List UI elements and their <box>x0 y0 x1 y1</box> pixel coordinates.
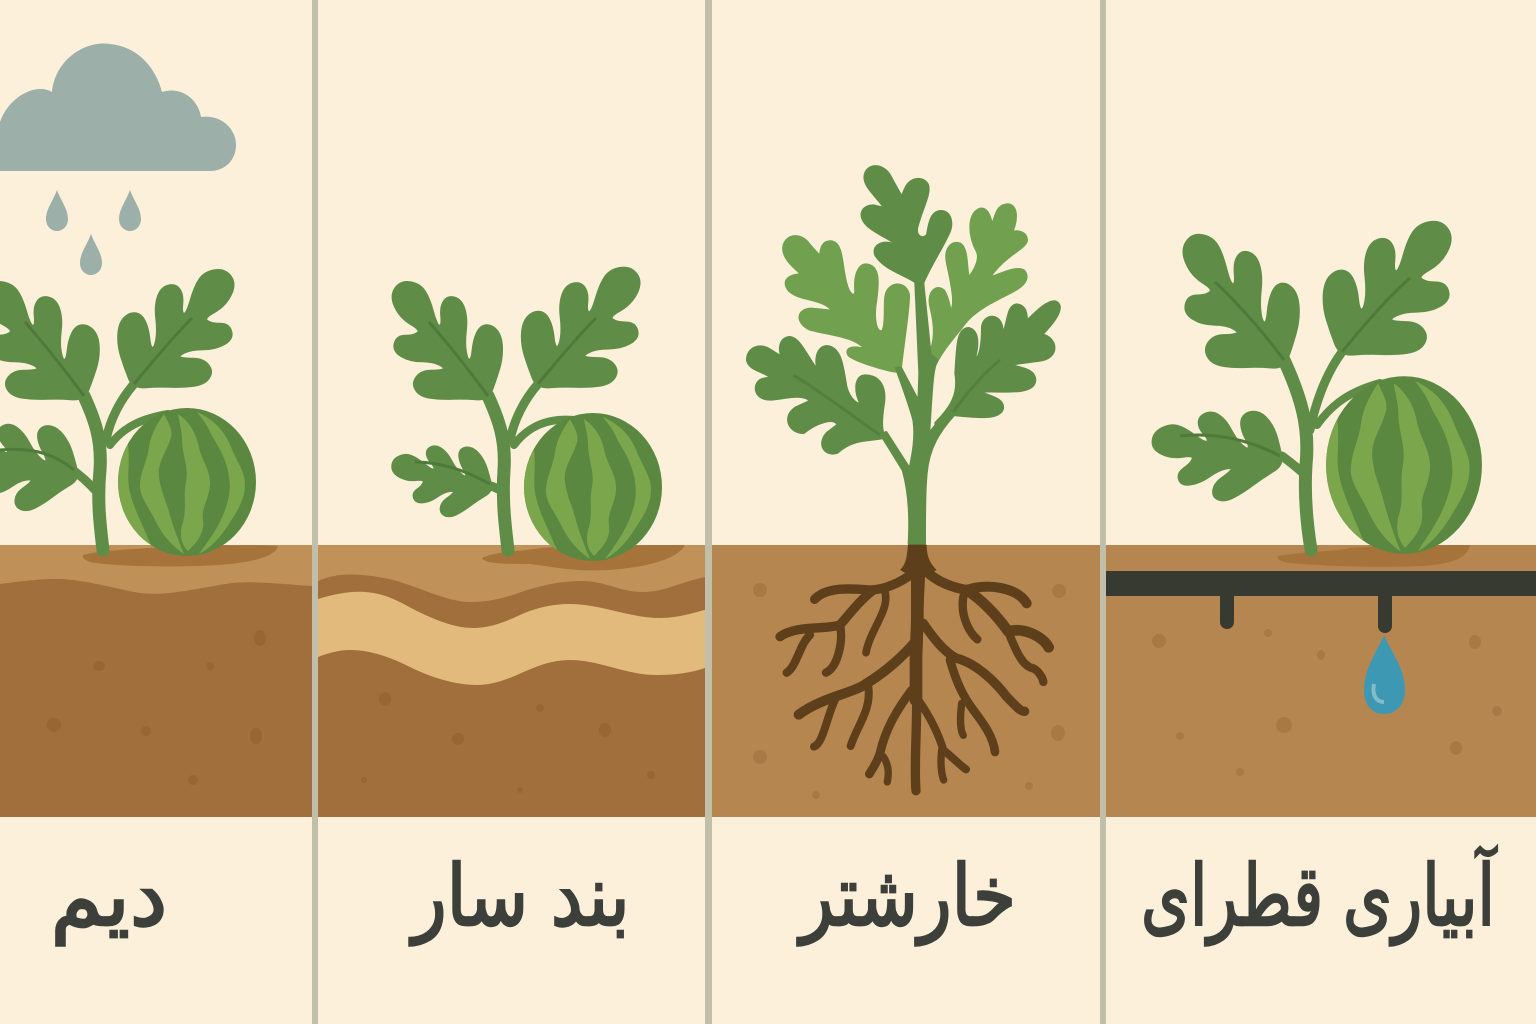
leaf: top <box>863 167 950 283</box>
leaf: upper left <box>784 237 908 371</box>
soil: drip <box>1106 545 1536 817</box>
drip pipe <box>1106 571 1536 633</box>
dividers <box>312 0 1106 1024</box>
icon: rain drops <box>46 190 141 275</box>
plant: flood-bed watermelon <box>388 268 685 570</box>
plant: drip watermelon <box>1148 222 1482 567</box>
leaf: lower left <box>748 338 883 452</box>
label: flood-bed: بند سار <box>409 848 630 945</box>
leaf: upper right <box>930 206 1026 370</box>
roots <box>780 545 1049 791</box>
soil: camelthorn <box>712 545 1100 817</box>
panel: rainfed farming <box>0 43 312 946</box>
label: drip irrigation: آبیاری قطرای <box>1141 846 1498 945</box>
label: camelthorn: خارشتر <box>796 848 1016 946</box>
icon: rain cloud <box>0 43 236 171</box>
soil: layered with sand <box>318 545 705 817</box>
icon: water drop <box>1364 635 1405 714</box>
soil: rainfed <box>0 545 312 817</box>
panel: drip irrigation <box>1106 222 1536 945</box>
label: rainfed: دیم <box>51 847 167 946</box>
panel: camelthorn <box>712 167 1100 946</box>
plant: rainfed watermelon <box>0 270 278 566</box>
leaf: lower right <box>937 303 1059 423</box>
stem <box>882 283 953 543</box>
plant: camelthorn stem and leaves <box>748 167 1059 543</box>
panel: flood-bed <box>318 268 705 945</box>
